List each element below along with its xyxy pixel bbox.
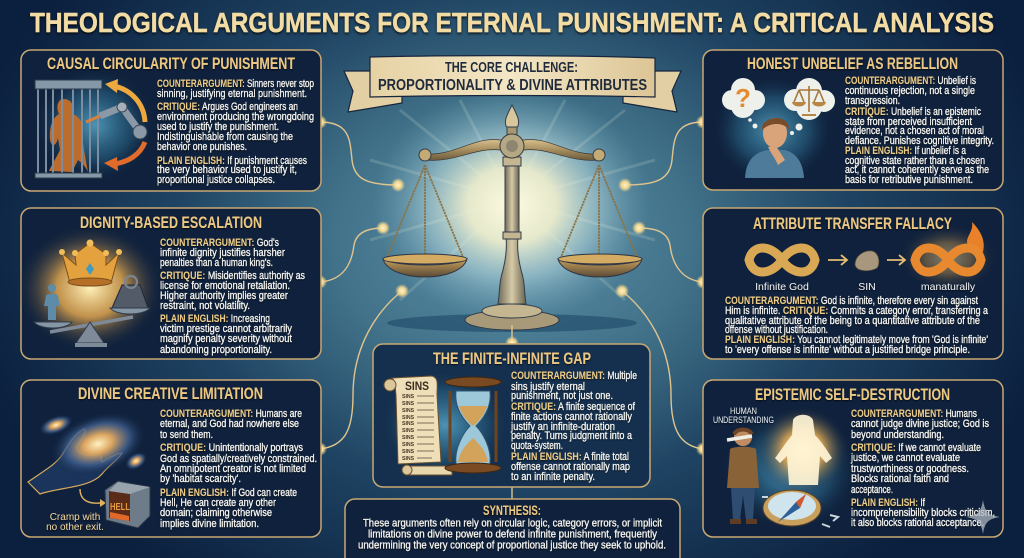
- argument text: eternal, and God had nowhere else: [160, 418, 299, 430]
- argument text: basis for retributive punishment.: [845, 174, 973, 186]
- argument text: proportional justice collapses.: [157, 174, 275, 186]
- argument text: incomprehensibility blocks criticism,: [851, 507, 995, 519]
- argument text: COUNTERARGUMENT: Humans are: [160, 408, 302, 420]
- heading: CAUSAL CIRCULARITY OF PUNISHMENT: [47, 55, 295, 73]
- icon: sins scroll: SINS: [402, 408, 415, 414]
- argument text: license for emotional retaliation.: [160, 280, 290, 292]
- argument text: cannot judge divine justice; God is: [851, 418, 989, 430]
- argument text: acceptance.: [851, 484, 893, 496]
- argument text: justice, we cannot evaluate: [850, 452, 960, 464]
- argument text: PLAIN ENGLISH: If unbelief is a: [845, 145, 967, 157]
- argument text: [160, 408, 317, 530]
- icon: sins scroll: SINS: [402, 435, 415, 441]
- banner: core challenge: [344, 56, 681, 112]
- icon captions: Infinite God: [755, 281, 809, 293]
- sparkle mark: [966, 500, 1000, 534]
- icon: sins scroll: SINS: [402, 415, 415, 421]
- argument text: penalties than a human king's.: [160, 257, 273, 269]
- argument text: CRITIQUE: Unbelief is an epistemic: [845, 106, 981, 118]
- icon: sins scroll: [384, 376, 452, 475]
- argument text: act, it cannot coherently serve as the: [845, 164, 989, 176]
- argument text: PLAIN ENGLISH: If punishment causes: [157, 155, 307, 167]
- synthesis heading: SYNTHESIS:: [483, 503, 541, 518]
- argument text: domain; claiming otherwise: [160, 507, 272, 519]
- argument text: Indistinguishable from causing the: [157, 131, 293, 143]
- caption: cramp: Cramp with: [50, 512, 100, 523]
- icon: blindfolded man, divine figure, broken compass: [727, 415, 838, 527]
- argument text: justify an infinite-duration: [510, 421, 615, 433]
- icon: sins scroll: SINS: [402, 401, 415, 407]
- icon: prisoner in cage with robot arm: [35, 79, 147, 178]
- label: human understanding: HUMAN: [730, 406, 757, 417]
- connector lines: [320, 122, 703, 499]
- argument text: PLAIN ENGLISH: If: [851, 497, 926, 509]
- argument text: magnify penalty severity without: [160, 333, 292, 345]
- argument text: finite actions cannot rationally: [511, 411, 632, 423]
- heading: DIGNITY-BASED ESCALATION: [80, 214, 262, 232]
- argument text: [157, 78, 314, 186]
- icon: infinity to sin to burning infinity: [749, 222, 984, 293]
- icon: sins scroll: SINS: [402, 394, 415, 400]
- panel: dignity-based escalation: [16, 208, 321, 359]
- argument text: COUNTERARGUMENT: Humans: [851, 408, 977, 420]
- panel: divine creative limitation: [21, 380, 321, 537]
- argument text: COUNTERARGUMENT: Sinners never stop: [157, 78, 314, 90]
- argument text: offense cannot rationally map: [511, 461, 630, 473]
- argument text: evidence, not a chosen act of moral: [845, 125, 984, 137]
- argument text: Hell, He can create any other: [160, 497, 276, 509]
- argument text: Him is infinite. CRITIQUE: Commits a category error, transferring a: [725, 305, 989, 317]
- icon: sins scroll: SINS: [402, 456, 415, 462]
- argument text: [850, 408, 995, 529]
- argument text: CRITIQUE: Argues God engineers an: [157, 101, 298, 113]
- argument text: environment producing the wrongdoing: [157, 111, 314, 123]
- icon label: hell: HELL: [110, 501, 130, 513]
- argument text: CRITIQUE: If we cannot evaluate: [851, 442, 981, 454]
- connector nodes: [313, 115, 710, 456]
- icon: sins scroll: SINS: [405, 381, 429, 393]
- panel: epistemic self-destruction: [703, 380, 1003, 537]
- argument text: by 'habitat scarcity'.: [160, 473, 241, 485]
- argument text: beyond understanding.: [851, 429, 944, 441]
- icon captions: SIN: [858, 281, 876, 293]
- heading: EPISTEMIC SELF-DESTRUCTION: [755, 386, 950, 404]
- synthesis text: These arguments often rely on circular logic, category errors, or implicit: [363, 518, 662, 530]
- argument text: PLAIN ENGLISH: A finite total: [511, 451, 629, 463]
- banner heading: THE CORE CHALLENGE:: [445, 60, 578, 76]
- icon: sins scroll: SINS: [402, 442, 415, 448]
- argument text: the very behavior used to justify it,: [157, 164, 297, 176]
- icon: galaxy, hand and hell box: [28, 400, 155, 528]
- panel: honest unbelief: [703, 50, 1003, 190]
- central balance scale: [370, 87, 655, 332]
- icon: thinking person with thought clouds: [722, 78, 835, 178]
- synthesis text: undermining the very concept of proportional justice they seek to uphold.: [358, 540, 666, 552]
- argument text: quota-system.: [511, 440, 563, 452]
- argument text: abandoning proportionality.: [160, 344, 272, 356]
- argument text: CRITIQUE: Misidentifies authority as: [160, 270, 305, 282]
- argument text: implies divine limitation.: [160, 518, 259, 530]
- argument text: PLAIN ENGLISH: If God can create: [160, 487, 297, 499]
- argument text: restraint, not volatility.: [160, 300, 250, 312]
- argument text: transgression.: [845, 95, 900, 107]
- argument text: PLAIN ENGLISH: Increasing: [160, 313, 270, 325]
- argument text: used to justify the punishment.: [157, 121, 279, 133]
- argument text: trustworthiness or goodness.: [851, 463, 969, 475]
- argument text: COUNTERARGUMENT: God is infinite, therefore every sin against: [725, 295, 978, 307]
- argument text: sinning, justifying eternal punishment.: [157, 88, 307, 100]
- argument text: COUNTERARGUMENT: Multiple: [511, 370, 637, 382]
- heading: HONEST UNBELIEF AS REBELLION: [747, 55, 958, 73]
- argument text: cognitive state rather than a chosen: [845, 155, 985, 167]
- argument text: to an infinite penalty.: [511, 471, 595, 483]
- icon captions: manaturally: [921, 281, 976, 293]
- icon: thinking person with thought clouds: ?: [735, 83, 751, 113]
- argument text: behavior one punishes.: [157, 141, 247, 153]
- label: human understanding: UNDERSTANDING: [713, 415, 774, 426]
- argument text: An omnipotent creator is not limited: [160, 463, 306, 475]
- panel: causal circularity: [21, 50, 321, 191]
- argument text: Higher authority implies greater: [160, 290, 288, 302]
- argument text: it also blocks rational acceptance.: [851, 517, 984, 529]
- argument text: [845, 75, 994, 186]
- argument text: qualitative attribute of the being to a quantitative attribute of the: [725, 315, 980, 327]
- argument text: [725, 295, 989, 356]
- panel: synthesis: [345, 499, 680, 558]
- argument text: CRITIQUE: Unintentionally portrays: [160, 442, 303, 454]
- banner heading: PROPORTIONALITY & DIVINE ATTRIBUTES: [378, 77, 647, 94]
- argument text: COUNTERARGUMENT: God's: [160, 237, 279, 249]
- argument text: defiance. Punishes cognitive integrity.: [845, 135, 994, 147]
- synthesis text: [358, 518, 666, 552]
- icon: crown over tilted seesaw: [34, 240, 150, 347]
- argument text: to 'every offense is infinite' without a justified bridge principle.: [725, 344, 970, 356]
- argument text: [160, 237, 305, 356]
- heading: DIVINE CREATIVE LIMITATION: [78, 385, 263, 403]
- heading: ATTRIBUTE TRANSFER FALLACY: [753, 215, 952, 233]
- icon: sins scroll: SINS: [402, 421, 415, 427]
- argument text: to send them.: [160, 429, 213, 441]
- argument text: COUNTERARGUMENT: Unbelief is: [845, 75, 976, 87]
- panel: finite-infinite gap: [373, 344, 650, 487]
- argument text: state from perceived insufficient: [845, 116, 972, 128]
- panel: attribute transfer fallacy: [703, 208, 1003, 359]
- argument text: God as spatially/creatively constrained.: [160, 453, 317, 465]
- argument text: offense without justification.: [725, 324, 828, 336]
- argument text: sins justify eternal: [511, 381, 585, 393]
- caption: cramp: no other exit.: [46, 522, 104, 533]
- synthesis text: limitations on divine power to defend infinite punishment, frequently: [368, 528, 657, 540]
- argument text: penalty. Turns judgment into a: [511, 430, 633, 442]
- argument text: infinite dignity justifies harsher: [160, 247, 285, 259]
- icon: sins scroll: SINS: [402, 428, 415, 434]
- argument text: [510, 370, 637, 483]
- argument text: continuous rejection, not a single: [845, 85, 975, 97]
- icon: hourglass: [445, 377, 501, 473]
- argument text: Blocks rational faith and: [851, 473, 949, 485]
- argument text: CRITIQUE: A finite sequence of: [511, 401, 636, 413]
- argument text: punishment, not just one.: [511, 390, 613, 402]
- icon: sins scroll: SINS: [402, 449, 415, 455]
- argument text: victim prestige cannot arbitrarily: [160, 323, 292, 335]
- heading: THE FINITE-INFINITE GAP: [433, 350, 591, 368]
